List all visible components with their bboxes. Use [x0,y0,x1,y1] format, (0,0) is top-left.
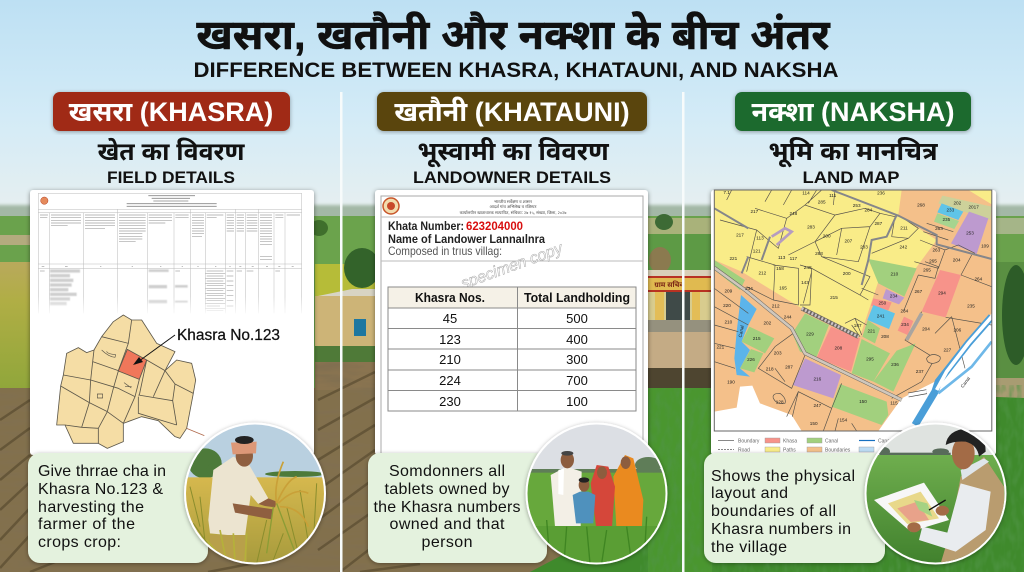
heading: landowner details [413,137,611,187]
parcel numbers: 203 [860,244,868,249]
callout: khasra: farmer of the [38,516,135,533]
parcel numbers: 253 [966,230,974,235]
building right: ग्राम सचिव [654,281,684,289]
parcel numbers: 217 [736,233,744,238]
parcel numbers: 284 [864,208,873,213]
parcel numbers: 113 [756,235,764,240]
parcel numbers: 233 [946,208,955,213]
parcel lines [714,190,992,431]
parcel numbers: 221 [867,329,876,334]
parcel numbers: 268 [917,203,925,208]
callout: khatauni: person [422,534,472,551]
title [194,11,838,82]
parcel numbers: 263 [935,226,943,231]
parcel numbers: 226 [747,357,755,362]
parcel numbers: 114 [802,190,810,195]
map legend: Road [738,448,750,454]
map legend: Paths [783,448,796,454]
parcel numbers: 287 [785,364,793,369]
parcel numbers: 187 [854,323,862,328]
badge: khatauni: खतौनी (KHATAUNI) [394,97,630,127]
callout: khatauni: owned and that [390,516,505,533]
badge: khasra [53,92,290,131]
right-side tree [1002,265,1024,365]
roads [714,190,992,400]
parcel numbers: Canal [960,376,971,389]
document header: भारतीय सर्वेक्षण व शासन [494,199,533,204]
parcel numbers: 253 [853,203,861,208]
parcel numbers: 121 [753,249,761,254]
callout: khatauni: tablets owned by [384,481,510,498]
table: khasra numbers and landholding [388,287,636,411]
parcel numbers: 207 [844,238,853,243]
parcel numbers: 221 [729,256,738,261]
parcel numbers: 210 [890,272,899,277]
parcel numbers: 248 [804,265,812,270]
parcel numbers: 154 [839,418,848,423]
photo: farmer harvesting rice [183,420,327,567]
parcel numbers: 218 [766,367,774,372]
heading: land map [768,137,938,187]
parcel numbers: 265 [929,258,937,263]
parcel numbers: 128 [776,399,784,404]
heading: field details: FIELD DETAILS [107,168,235,187]
parcel numbers: 7.1 [723,190,730,195]
parcel numbers: 227 [943,347,952,352]
parcel numbers: 241 [877,314,885,319]
parcel numbers: 215 [753,336,761,341]
photo: farming family in field [523,420,670,566]
badge: naksha [735,92,971,131]
canal on right [908,317,992,425]
subtitle: DIFFERENCE BETWEEN KHASRA, KHATAUNI, AND NAKSHA [194,59,838,82]
parcel numbers: 209 [724,289,733,294]
parcel numbers: 220 [723,303,731,308]
badge: khatauni [377,92,647,131]
callout: khasra: harvesting the [38,499,144,516]
parcel numbers: 202 [953,200,962,205]
document header [460,199,567,215]
parcel numbers: 165 [779,285,787,290]
heading: land map: भूमि का मानचित्र [768,137,938,168]
parcel numbers: 203 [774,350,782,355]
map legend: Canal [825,438,838,444]
label: khasra no. 123: Khasra No.123 [177,327,280,344]
table: khasra numbers and landholding: Khasra Nos. [415,290,485,305]
parcel numbers: 265 [923,268,931,273]
document header: कार्यालयीन खाताधारक सत्यापित, संचिका: २७ १५, संख्या, जिला, २०२७ [460,210,567,215]
parcel numbers: 229 [806,332,814,337]
parcel numbers: 143 [801,280,809,285]
card: naksha map [711,190,996,455]
parcel numbers: 242 [899,244,908,249]
parcel numbers: 150 [859,399,867,404]
table: khasra register [37,193,303,317]
parcel numbers: 250 [878,300,887,305]
title: खसरा, खतौनी और नक्शा के बीच अंतर [196,11,830,58]
parcel numbers: Canal [738,325,745,338]
parcel numbers: 217 [750,209,759,214]
building right [648,214,712,388]
column dividers [340,92,342,572]
parcel numbers: 263 [932,248,941,253]
parcel numbers: 109 [981,244,989,249]
parcel numbers: 206 [953,328,962,333]
table: khasra numbers and landholding: 700 [566,373,588,388]
parcel numbers: 283 [815,251,823,256]
callout: khatauni: the Khasra numbers [374,499,520,516]
table: khasra numbers and landholding: 500 [566,311,588,326]
badge: khasra: खसरा (KHASRA) [69,97,273,127]
owner details: Name of Landower Lannaılnra [388,232,545,246]
panel: khasra [28,92,1011,568]
parcel numbers: 236 [877,190,885,195]
parcel numbers: 235 [942,217,951,222]
panel: khatauni [375,92,648,455]
table: khasra numbers and landholding: 210 [439,352,461,367]
parcel numbers: 234 [890,294,898,299]
owner details: Khata Number: [388,219,464,233]
parcel numbers: 221 [716,344,725,349]
map legend: Boundaries [825,448,851,454]
watermark: specimen copy: specimen copy [459,240,566,293]
parcel numbers: 211 [900,225,908,230]
heading: landowner details: LANDOWNER DETAILS [413,168,611,187]
badge: naksha: नक्शा (NAKSHA) [751,97,955,127]
parcel numbers: 204 [922,326,930,331]
building left [310,218,380,362]
parcel numbers: 2017 [968,204,979,209]
owner details [388,219,545,258]
white outside [714,386,802,431]
document header: आदर्श गांव अभिलेख व रजिस्टर [490,203,537,209]
parcel numbers: 283 [807,224,815,229]
callout: naksha: Khasra numbers in [711,521,851,538]
table: khasra numbers and landholding: 123 [439,332,461,347]
parcel numbers: 216 [813,377,822,382]
heading: land map: LAND MAP [802,168,900,187]
yellow region [714,190,937,337]
parcel numbers: 212 [758,270,767,275]
table: khasra numbers and landholding: 230 [439,394,461,409]
parcel numbers [716,190,989,426]
parcel numbers: 115 [890,400,898,405]
callout: naksha: the village [711,539,787,556]
callout: khasra: Give thrrae cha in [38,463,166,480]
map legend: Canal [878,438,891,444]
parcel numbers: 200 [843,271,851,276]
parcel numbers: 267 [914,289,923,294]
owner details: 623204000 [466,219,523,233]
table: khasra numbers and landholding: Total Landholding [524,290,630,305]
table: khasra numbers and landholding: 45 [443,311,457,326]
parcel numbers: 117 [790,256,797,261]
parcel numbers: 285 [818,199,826,204]
parcel numbers: 208 [834,346,843,351]
parcel numbers: 204 [953,258,961,263]
table: khasra numbers and landholding: 400 [566,332,588,347]
callout: naksha: layout and [711,485,788,502]
parcel numbers: 294 [938,290,946,295]
parcel numbers: 111 [829,193,837,198]
parcel numbers: 190 [727,379,735,384]
parcel numbers: 248 [789,211,798,216]
parcel numbers: 295 [866,357,874,362]
parcel numbers: 158 [776,266,784,271]
map legend: Khasa [783,438,797,444]
callout: naksha [704,453,885,563]
parcel numbers: 264 [974,277,983,282]
cadastral village map [714,190,992,431]
parcel numbers: 113 [778,255,786,260]
parcel numbers: 212 [772,304,780,309]
parcel numbers: 244 [784,314,792,319]
map: khasra parcels [57,315,204,448]
callout: khasra [28,453,208,563]
card: khatauni document [375,190,648,455]
table: khasra numbers and landholding: 300 [566,352,588,367]
soil [0,388,700,572]
callout: khatauni: Somdonners all [389,463,505,480]
map legend [718,438,891,454]
parcel numbers: 247 [813,403,822,408]
heading: landowner details: भूस्वामी का विवरण [417,137,609,168]
label: khasra no. 123 [133,327,280,365]
callout: naksha: Shows the physical [711,468,855,485]
parcel numbers: 234 [900,308,909,313]
callout: khasra: Khasra No.123 & [38,481,163,498]
panel: naksha [711,92,996,455]
parcel numbers: 235 [967,303,975,308]
callout: khatauni [368,453,547,563]
icon: government seal [383,198,399,214]
parcel numbers: 210 [724,320,733,325]
table: khasra numbers and landholding: 224 [439,373,461,388]
parcel numbers: 215 [830,295,838,300]
parcel numbers: 287 [874,221,883,226]
heading: field details [98,137,245,187]
parcel numbers: 237 [916,369,924,374]
map legend: Boundary [738,438,760,444]
photo: surveyor holding map [861,420,1011,568]
card: khasra document [30,190,314,455]
callout: khasra: crops crop: [38,534,121,551]
callout: naksha: boundaries of all [711,503,836,520]
table: khasra numbers and landholding: 100 [566,394,588,409]
parcel numbers: 208 [881,334,889,339]
parcel numbers: 202 [763,320,772,325]
heading: field details: खेत का विवरण [98,137,245,166]
owner details: Composed in trıus villag: [388,244,502,258]
coloured parcels [938,196,992,220]
parcel numbers: 236 [891,362,899,367]
parcel numbers: 200 [823,234,831,239]
parcel numbers: 234 [745,286,753,291]
parcel numbers: 234 [901,322,909,327]
parcel numbers: 150 [810,421,818,426]
